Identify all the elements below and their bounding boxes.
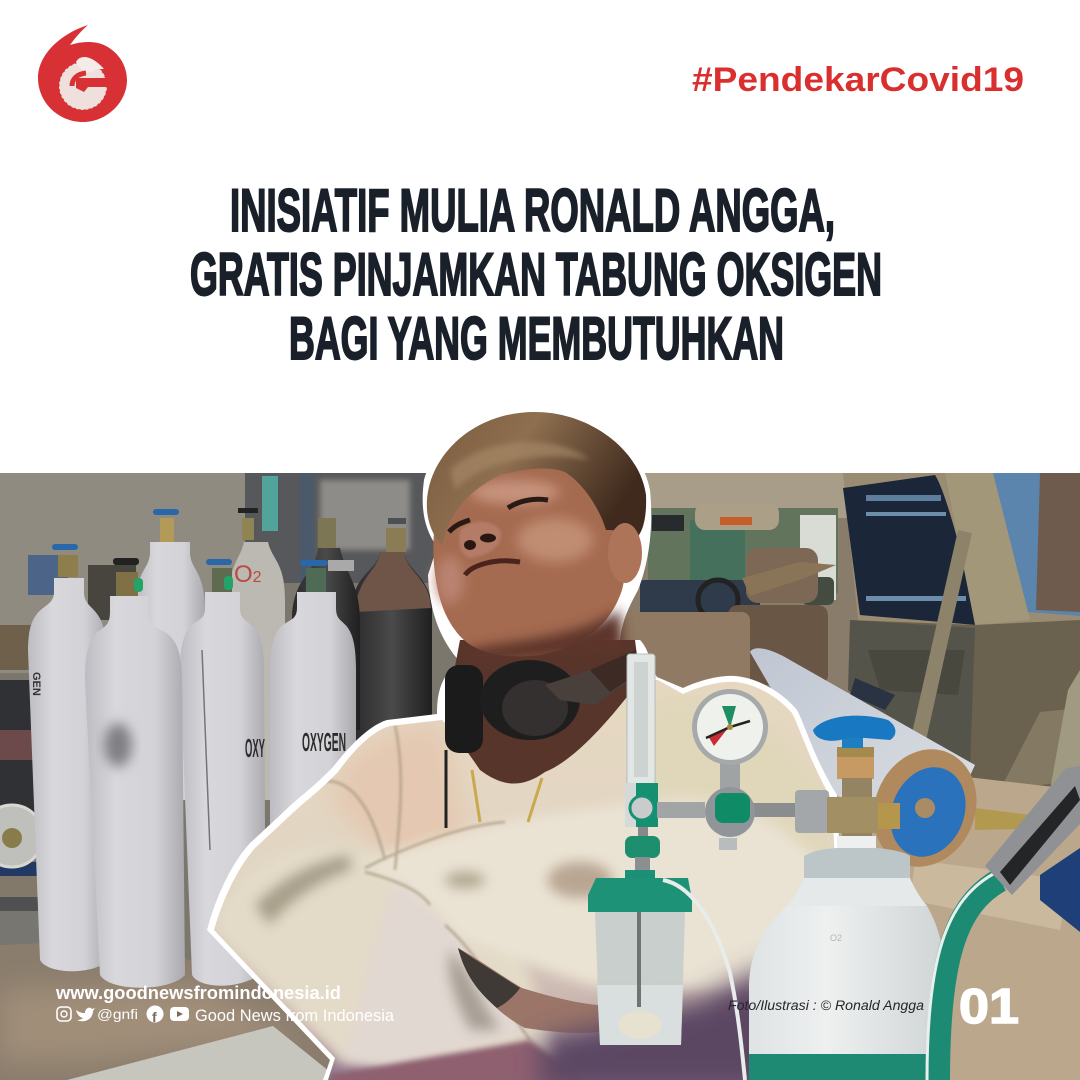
- sun visor: [695, 508, 779, 530]
- title: [190, 177, 882, 372]
- cream right shoulder: [640, 696, 830, 880]
- hair highlight: [450, 442, 590, 490]
- photo: room with oxygen cylinders: OXYGEN: [302, 727, 346, 757]
- back cylinder O2: [228, 508, 285, 800]
- side window: [843, 475, 976, 625]
- pipe right: [752, 803, 798, 817]
- dark cylinders at back: [88, 518, 432, 741]
- cylinder 1: GEN: [30, 672, 42, 696]
- rear seat: [837, 778, 1080, 1080]
- icon: facebook: [146, 1006, 164, 1025]
- photo: car interior: [600, 473, 1080, 1080]
- necklace: [472, 770, 542, 822]
- seat belt: [910, 530, 972, 745]
- white outline: [207, 410, 850, 1080]
- pink lower band: [330, 1040, 590, 1080]
- photo credit: Foto/Ilustrasi : © Ronald Angga: [728, 998, 925, 1013]
- eyes: [449, 499, 548, 532]
- lower sleeve: [338, 894, 519, 1070]
- back cylinder left: [135, 509, 205, 800]
- cylinder 2: [85, 558, 185, 988]
- icon: youtube: [170, 1007, 189, 1021]
- logo: [38, 25, 127, 122]
- page number: 01: [959, 980, 1019, 1034]
- left sleeve: [223, 926, 556, 1067]
- back cylinder O2: O2: [234, 561, 262, 588]
- photo: room with oxygen cylinders: OXY: [245, 733, 265, 763]
- valve body: [813, 716, 900, 842]
- lying cylinder in car: [750, 648, 975, 797]
- nose: [459, 522, 501, 558]
- cylinder 4: [270, 560, 356, 840]
- pipe left: [657, 802, 705, 818]
- sweater: [200, 680, 860, 1080]
- neck: [445, 640, 640, 784]
- ceiling: [644, 473, 847, 518]
- tattooed forearm: [458, 948, 600, 1033]
- face: [433, 455, 626, 656]
- website and social footer: @gnfi: [97, 1006, 138, 1022]
- face highlights: [436, 480, 625, 665]
- flowmeter: [625, 654, 660, 871]
- ear: [608, 523, 642, 583]
- icon: instagram: [57, 1007, 71, 1021]
- cylinder 3: [180, 559, 266, 986]
- oxygen tube: [663, 880, 745, 1080]
- gauge on floor: [0, 804, 37, 876]
- headrest and seats: [699, 548, 836, 685]
- website and social footer: Good News from Indonesia: [195, 1007, 395, 1025]
- regulator: [705, 787, 755, 850]
- floor tile: [67, 1026, 340, 1080]
- photo: room with oxygen cylinders: [0, 473, 457, 1080]
- green hose: [938, 880, 1000, 1080]
- website and social footer: www.goodnewsfromindonesia.id: [55, 983, 341, 1003]
- left shelf: [0, 625, 34, 812]
- main white oxygen cylinder: [749, 836, 945, 1080]
- door panels: [850, 620, 1080, 800]
- mouth: [465, 561, 520, 575]
- humidifier bottle: [588, 870, 692, 1045]
- hashtag: #PendekarCovid19: [692, 61, 1024, 99]
- cylinder 1: [28, 544, 108, 971]
- icon: facebook: f: [152, 1009, 157, 1025]
- blue shoe: [1040, 848, 1080, 932]
- pillar and rear window: [945, 473, 1030, 625]
- floor mat: [0, 940, 330, 1080]
- website and social footer: [55, 983, 395, 1025]
- pink upper arm: [334, 721, 464, 849]
- sweater shadows: [255, 855, 612, 1030]
- pressure gauge: [692, 689, 768, 790]
- icon: twitter: [76, 1008, 95, 1021]
- headphones: [445, 650, 640, 828]
- blue rusty valve disc: [876, 749, 976, 867]
- handle: [985, 766, 1080, 895]
- main white oxygen cylinder: O2: [830, 933, 842, 943]
- windshield: [640, 508, 838, 620]
- person cutout: Ronald Angga: [200, 410, 860, 1080]
- oxygen equipment: [588, 654, 1080, 1080]
- hair: [427, 412, 646, 545]
- crossed forearm: [365, 798, 830, 1000]
- connector nut: [795, 790, 829, 833]
